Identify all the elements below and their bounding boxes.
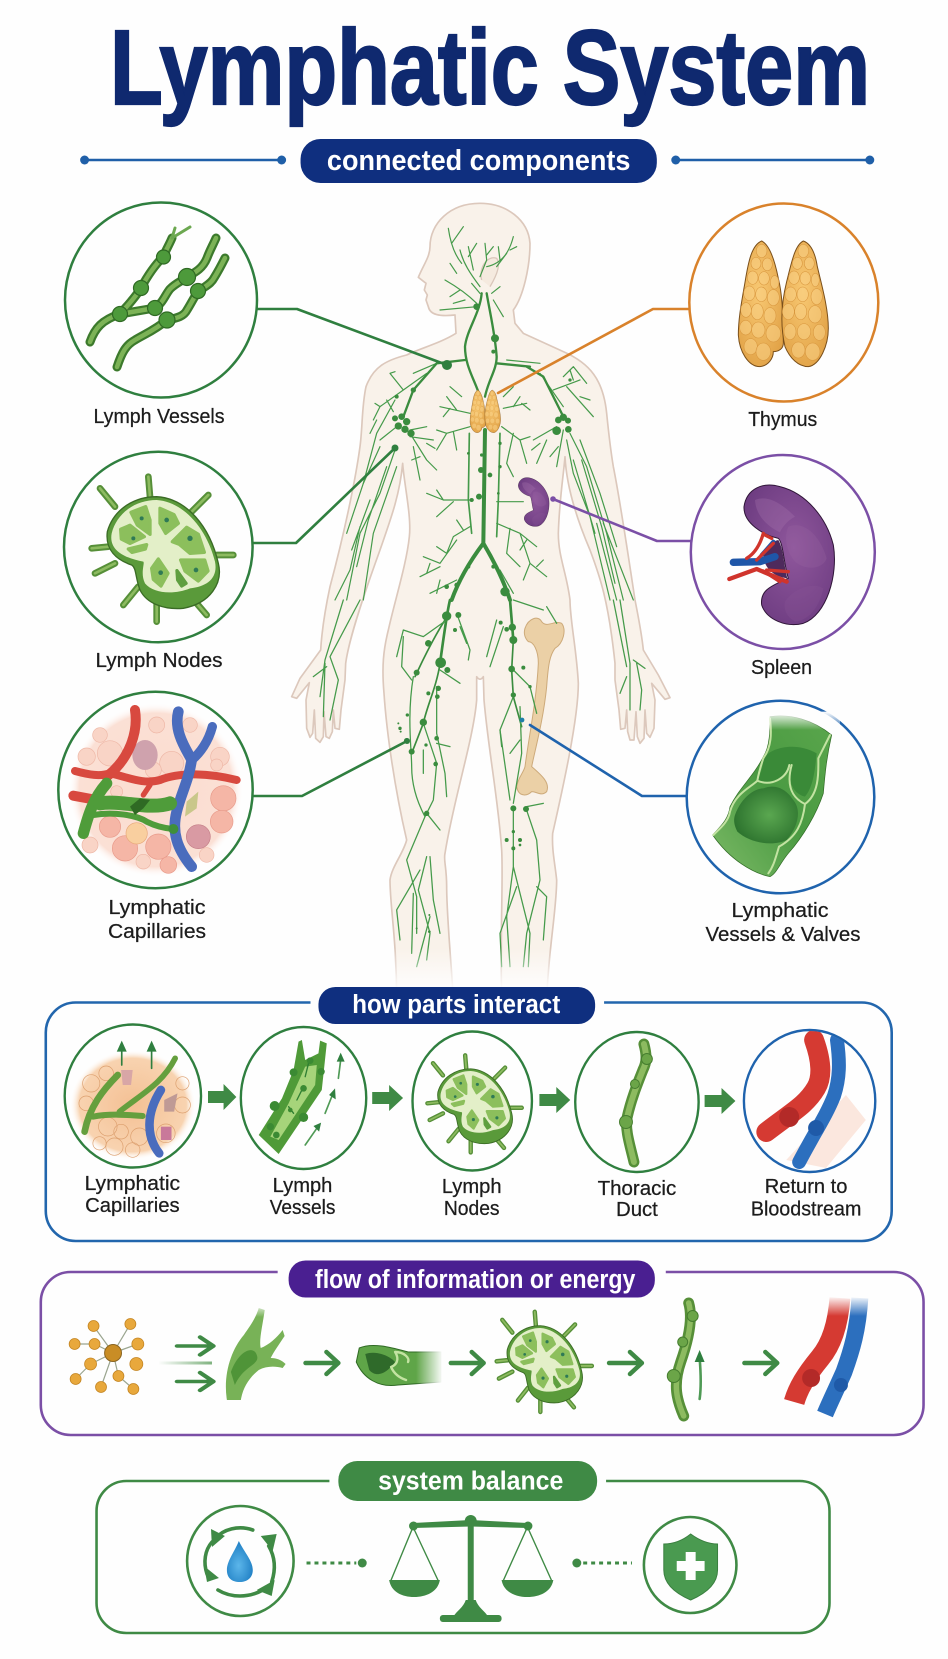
step: return to bloodstream — [744, 1030, 875, 1172]
panel: thymus — [689, 204, 878, 431]
icon: blood vessels — [794, 1296, 874, 1414]
arrow — [539, 1087, 570, 1113]
step labels: Nodes — [444, 1198, 500, 1220]
arrow — [208, 1084, 236, 1110]
leg fade — [375, 948, 575, 990]
lymph node dots upper — [392, 303, 572, 596]
panel: lymphatic vessels and valves — [687, 701, 874, 946]
femur — [517, 618, 564, 795]
panel: flow of information or energy — [41, 1260, 924, 1435]
label: lymph nodes: Lymph Nodes — [96, 650, 222, 672]
heading: connected components — [80, 139, 874, 183]
connector dots left — [307, 1558, 367, 1568]
step labels: Lymph — [273, 1175, 332, 1197]
icon: particles — [69, 1318, 144, 1394]
connector: capillaries — [253, 738, 410, 796]
panel: lymphatic capillaries — [58, 692, 253, 943]
step: lymphatic capillaries — [65, 1024, 201, 1168]
icon: lymph vessels — [90, 227, 225, 367]
small thymus on body — [470, 390, 501, 433]
step labels: Thoracic — [598, 1178, 676, 1200]
panel: system balance — [97, 1461, 829, 1633]
panel: lymph nodes — [64, 452, 253, 672]
main ducts — [403, 293, 563, 600]
connector: valves — [520, 718, 687, 796]
label: lymph vessels: Lymph Vessels — [94, 406, 224, 428]
step labels: Bloodstream — [751, 1198, 861, 1221]
heading: how parts interact: how parts interact — [352, 991, 561, 1019]
label: lymphatic capillaries — [108, 897, 206, 943]
step: lymph vessels — [241, 1027, 366, 1169]
icon: duct — [667, 1303, 705, 1416]
icon: spleen — [729, 485, 834, 625]
icon: lymph node — [497, 1312, 592, 1412]
arrow — [705, 1088, 735, 1114]
icon: valve — [713, 712, 840, 877]
body silhouette — [292, 203, 670, 1000]
step labels: Vessels — [270, 1197, 335, 1219]
label: lymphatic vessels and valves: Vessels & Valves — [706, 924, 860, 946]
label: lymphatic capillaries: Lymphatic — [108, 897, 206, 919]
step: thoracic duct — [575, 1032, 699, 1172]
leg vessels — [313, 600, 645, 967]
icon: balance scale — [389, 1515, 553, 1622]
arrow — [306, 1352, 338, 1374]
connector: lymph vessels — [257, 309, 452, 370]
heading: system balance — [338, 1461, 597, 1501]
heading: connected components: connected components — [327, 145, 630, 177]
step labels: Return to — [765, 1176, 847, 1198]
label: lymphatic vessels and valves — [706, 900, 860, 946]
panel: spleen — [691, 455, 875, 679]
label: thymus: Thymus — [748, 409, 817, 431]
step labels: Lymph — [442, 1176, 502, 1198]
step: lymph nodes — [413, 1032, 532, 1170]
icon: valve section — [356, 1345, 443, 1386]
body figure with lymph network — [292, 203, 670, 1000]
panel: how parts interact — [46, 987, 892, 1241]
connector: spleen — [550, 496, 691, 541]
heading: flow: flow of information or energy — [315, 1266, 636, 1294]
label: spleen: Spleen — [751, 657, 812, 679]
step labels — [85, 1173, 861, 1221]
icon: lymph node — [92, 477, 233, 622]
small spleen on body — [518, 478, 549, 526]
connector: lymph nodes — [253, 444, 398, 543]
icon: fluid cycle — [187, 1506, 294, 1616]
ear — [481, 258, 498, 287]
icon: capillary opening — [224, 1303, 286, 1400]
icon: thymus — [738, 241, 828, 367]
panel: lymph vessels — [65, 202, 257, 428]
arrow — [372, 1085, 403, 1111]
heading: system balance: system balance — [378, 1467, 563, 1496]
arrow — [451, 1352, 484, 1374]
label: lymphatic vessels and valves: Lymphatic — [732, 900, 828, 922]
connector dots right — [572, 1558, 632, 1568]
icon: shield — [644, 1517, 736, 1613]
step labels: Duct — [616, 1199, 658, 1221]
label: lymphatic capillaries: Capillaries — [108, 921, 206, 943]
heading: flow — [289, 1260, 655, 1298]
arrow — [744, 1352, 777, 1374]
connector: thymus — [498, 309, 689, 393]
arrows into vessel — [158, 1337, 213, 1390]
fine branches: head, chest, arms, abdomen — [335, 227, 633, 600]
step labels: Capillaries — [85, 1195, 180, 1217]
arrow — [609, 1352, 642, 1374]
step labels: Lymphatic — [85, 1173, 180, 1195]
icon: capillaries — [69, 703, 243, 877]
heading: how parts interact — [318, 987, 595, 1024]
